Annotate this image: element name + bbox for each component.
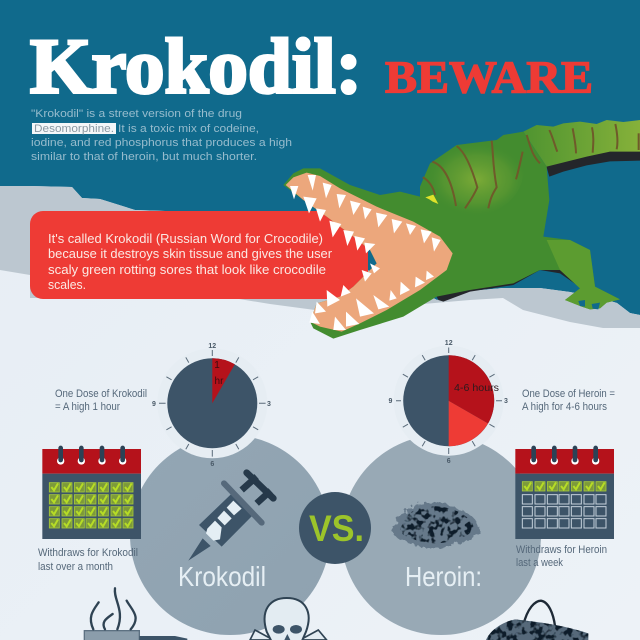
- label: krokodil dose: One Dose of Krokodil: [55, 388, 147, 400]
- calendar: heroin one week checked: [515, 446, 614, 539]
- label: heroin dose: A high for 4-6 hours: [522, 401, 607, 413]
- badge: vs: VS.: [309, 508, 364, 549]
- icon: basket of heroin: [486, 601, 588, 640]
- crocodile tail: [523, 120, 640, 167]
- intro text block: similar to that of heroin, but much shorter.: [31, 151, 257, 163]
- wedge: 6 hours: [449, 401, 488, 446]
- label: krokodil dose: [55, 388, 147, 413]
- label: krokodil withdrawal: last over a month: [38, 561, 113, 573]
- crocodile leg shadow: [437, 263, 582, 302]
- clock: heroin high 4-6 hours: 12: [445, 340, 453, 347]
- label: krokodil dose: = A high 1 hour: [55, 401, 120, 413]
- clock: heroin high 4-6 hours: 4-6 hours: [454, 382, 499, 394]
- wedge: 4 hours: [449, 355, 494, 423]
- clock: krokodil high 1 hour: [152, 343, 271, 468]
- crocodile body and jaws: [283, 132, 620, 339]
- clock: krokodil high 1 hour: 9: [152, 401, 156, 408]
- label: heroin dose: One Dose of Heroin =: [522, 388, 615, 400]
- callout: why it's called krokodil: because it destroys skin tissue and gives the user: [48, 246, 333, 261]
- crocodile mouth: [286, 173, 453, 332]
- crocodile lower teeth: [309, 263, 434, 330]
- crocodile foot highlight: [547, 240, 620, 309]
- calendar: krokodil all days checked: [42, 446, 141, 539]
- icon: syringe: [188, 473, 273, 561]
- label: krokodil: Krokodil: [178, 561, 266, 592]
- clock: krokodil high 1 hour: 1: [214, 360, 220, 371]
- callout: why it's called krokodil: [30, 211, 368, 299]
- intro text block: It is a toxic mix of codeine,: [118, 123, 259, 135]
- crocodile scale sores: [423, 124, 639, 208]
- label: heroin: Heroin:: [405, 561, 482, 592]
- clock: heroin high 4-6 hours: 6: [447, 458, 451, 465]
- clock: krokodil high 1 hour: 12: [208, 343, 216, 350]
- background: grey snow band: [0, 186, 640, 328]
- intro text block: iodine, and red phosphorus that produces a high: [31, 137, 292, 149]
- intro text block: [31, 108, 292, 163]
- callout: why it's called krokodil: It's called Krokodil (Russian Word for Crocodile): [48, 231, 323, 246]
- label: krokodil withdrawal: [38, 547, 138, 573]
- label: heroin withdrawal: [516, 544, 607, 569]
- wedge: 1 hour: [212, 358, 235, 403]
- panel: heroin circle: [341, 435, 541, 635]
- illustration: crocodile: [283, 120, 640, 339]
- callout: why it's called krokodil: scales.: [48, 277, 86, 292]
- intro text block: "Krokodil" is a street version of the drug: [31, 108, 242, 120]
- clock: heroin high 4-6 hours: 9: [389, 398, 393, 405]
- intro text block: Desomorphine.: [34, 123, 114, 135]
- icon: skull and crossbones: [250, 598, 327, 640]
- title: Krokodil:: [30, 22, 362, 110]
- badge: vs: [299, 492, 371, 564]
- label: krokodil withdrawal: Withdraws for Krokodil: [38, 547, 138, 559]
- crocodile upper teeth: [290, 175, 441, 253]
- crocodile tail shadow: [546, 151, 640, 177]
- label: heroin dose: [522, 388, 615, 413]
- panel: krokodil circle: [130, 435, 330, 635]
- clock: krokodil high 1 hour: hr: [215, 376, 224, 387]
- crocodile head dome: [420, 142, 524, 217]
- clock: krokodil high 1 hour: 3: [267, 401, 271, 408]
- crocodile foot gaps: [578, 300, 600, 309]
- icon: heroin pile: [392, 503, 479, 548]
- crocodile eye: [425, 195, 438, 204]
- clock: heroin high 4-6 hours: 3: [504, 398, 508, 405]
- heading: beware: BEWARE: [385, 52, 593, 102]
- label: heroin withdrawal: last a week: [516, 557, 563, 569]
- label: heroin withdrawal: Withdraws for Heroin: [516, 544, 607, 556]
- clock: krokodil high 1 hour: 6: [210, 461, 214, 468]
- callout: why it's called krokodil: scaly green rotting sores that look like crocodile: [48, 262, 326, 277]
- clock: heroin high 4-6 hours: [389, 340, 508, 465]
- icon: boiling pot: [84, 588, 187, 640]
- background: blue upper panel: [0, 0, 640, 315]
